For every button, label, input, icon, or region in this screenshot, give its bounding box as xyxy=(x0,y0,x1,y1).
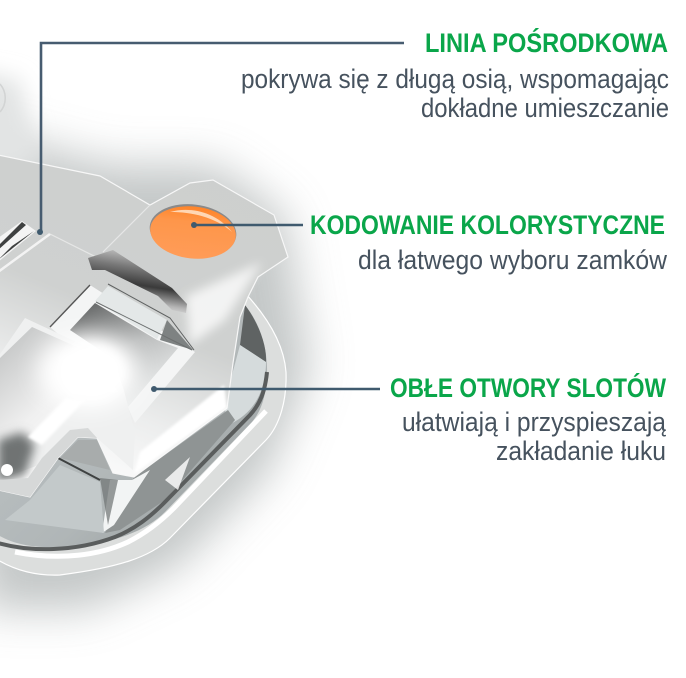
recessed well xyxy=(0,300,267,547)
slot side facet xyxy=(160,320,193,350)
bracket body xyxy=(0,155,288,497)
light lobe band xyxy=(0,428,97,497)
dark well facet xyxy=(105,410,235,533)
icon: orange colour code xyxy=(148,202,238,263)
description xyxy=(241,64,669,123)
left slot face xyxy=(0,327,118,437)
white stripe xyxy=(28,398,85,445)
lower reflections xyxy=(102,470,150,533)
small bright spot xyxy=(1,464,13,476)
background shadow xyxy=(0,70,310,610)
lower body white band xyxy=(134,385,227,474)
tie-wing bar xyxy=(88,250,187,313)
dark recess behind wing xyxy=(240,305,266,362)
callout: linia pośrodkowa xyxy=(241,28,669,123)
colour code recess xyxy=(147,199,239,263)
polished rim xyxy=(0,372,267,556)
description: dla łatwego wyboru zamków xyxy=(358,245,667,275)
upper left slot xyxy=(0,221,36,262)
light glare xyxy=(38,334,138,410)
highlight on right wing xyxy=(186,262,262,345)
description: ułatwiają i przyspieszają xyxy=(402,407,667,437)
base pad xyxy=(0,294,286,575)
right slot interior xyxy=(70,303,178,407)
icon: orthodontic bracket xyxy=(0,155,288,575)
right slot ledge xyxy=(95,286,167,339)
description: zakładanie łuku xyxy=(496,436,666,466)
right slot frame xyxy=(50,285,195,423)
description xyxy=(402,407,667,466)
leader line: linia pośrodkowa xyxy=(37,43,404,235)
gloss on orange dot xyxy=(170,210,232,232)
left slot block xyxy=(0,318,135,480)
light reflection in the well xyxy=(224,345,266,425)
lower left dark area xyxy=(0,432,35,482)
leader line: obłe otwory slotów xyxy=(151,386,380,392)
leader line: kodowanie kolorystyczne xyxy=(191,222,303,228)
callout: kodowanie kolorystyczne xyxy=(310,210,667,275)
wing crease xyxy=(50,205,150,258)
callout: obłe otwory slotów xyxy=(390,373,667,466)
